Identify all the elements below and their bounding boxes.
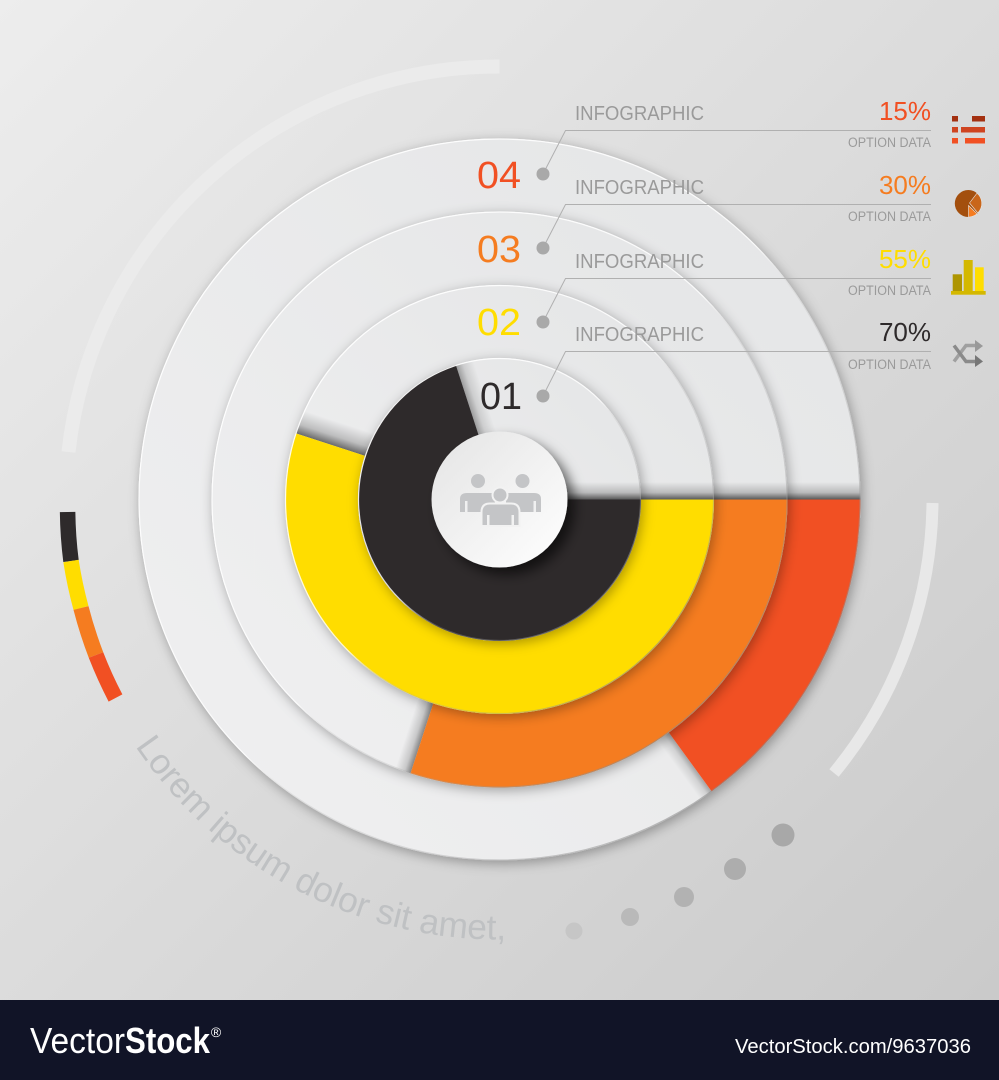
footer bar — [0, 1000, 999, 1080]
ring numbers: 04 — [477, 155, 521, 197]
INFOGRAPHIC labels: INFOGRAPHIC — [575, 251, 704, 273]
ring 2 with yellow 55% segment — [285, 285, 716, 714]
ring 1 with dark 70% segment — [358, 358, 642, 641]
INFOGRAPHIC labels: INFOGRAPHIC — [575, 324, 704, 346]
icon: shuffle arrows — [954, 340, 983, 367]
icon: bar chart — [951, 260, 986, 295]
footer URL: VectorStock.com/9637036 — [735, 1036, 971, 1058]
INFOGRAPHIC labels: INFOGRAPHIC — [575, 177, 704, 199]
ring numbers — [477, 155, 522, 418]
ring numbers: 01 — [480, 376, 522, 418]
percentages: 30% — [879, 170, 931, 200]
icon: pie chart — [955, 190, 982, 217]
ring 4 with red 15% segment — [138, 138, 862, 860]
footer bar: Stock — [125, 1020, 211, 1061]
OPTION DATA captions: OPTION DATA — [848, 209, 931, 224]
footer bar: Vector — [30, 1020, 125, 1061]
percentages: 55% — [879, 244, 931, 274]
OPTION DATA captions: OPTION DATA — [848, 283, 931, 298]
percentages — [879, 96, 931, 347]
decorative arc: lower right — [834, 503, 932, 773]
infographic canvas: Lorem ipsum dolor sit amet, — [137, 734, 503, 944]
segmented colour arc legend — [68, 512, 116, 698]
registered mark: ® — [211, 1024, 222, 1040]
icon: people — [460, 474, 541, 527]
percentages: 70% — [879, 317, 931, 347]
ring numbers: 03 — [477, 229, 521, 271]
callout lines — [543, 130, 931, 396]
INFOGRAPHIC labels — [575, 103, 704, 346]
curved caption text — [135, 746, 530, 940]
INFOGRAPHIC labels: INFOGRAPHIC — [575, 103, 704, 125]
ring 3 with orange 30% segment — [212, 212, 788, 788]
OPTION DATA captions: OPTION DATA — [848, 135, 931, 150]
decorative dots — [566, 824, 794, 940]
ring numbers: 02 — [477, 302, 521, 344]
percentages: 15% — [879, 96, 931, 126]
OPTION DATA captions — [848, 135, 931, 372]
callout dots — [536, 168, 550, 402]
decorative arc: upper left — [68, 66, 500, 452]
icon: list — [952, 116, 985, 144]
centre hub — [432, 432, 568, 568]
OPTION DATA captions: OPTION DATA — [848, 357, 931, 372]
